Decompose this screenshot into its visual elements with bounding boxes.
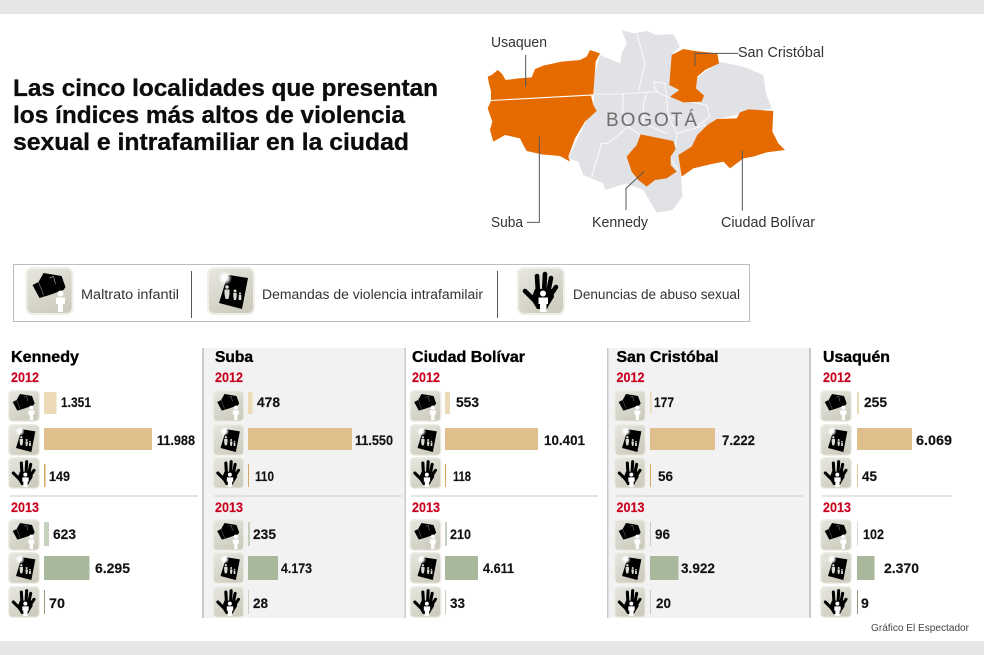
row: 2012 demandas <box>9 425 195 455</box>
map: gray districts <box>568 30 772 213</box>
legend: Demandas de violencia intrafamilair <box>208 268 484 314</box>
row: 2013 demandas <box>213 553 312 583</box>
row: 2013 demandas <box>821 553 919 583</box>
row: 2012 denuncias: 149 <box>49 468 70 484</box>
title <box>13 75 438 156</box>
row: 2013 maltrato: 235 <box>253 526 276 542</box>
row: 2012 maltrato <box>213 391 280 421</box>
row: 2013 demandas: 4.173 <box>281 560 312 576</box>
row: 2013 demandas <box>615 553 715 583</box>
panel: Ciudad Bolívar <box>410 349 598 617</box>
row: 2012 maltrato: 255 <box>864 394 887 410</box>
heading: Kennedy <box>11 349 79 366</box>
year 2013: 2013 <box>215 499 243 515</box>
row: 2013 denuncias <box>821 587 869 617</box>
title: los índices más altos de violencia <box>13 102 406 129</box>
row: 2012 demandas <box>821 425 952 455</box>
row: 2012 demandas <box>213 425 393 455</box>
row: 2012 denuncias: 56 <box>658 468 673 484</box>
legend: Maltrato infantil <box>26 268 179 314</box>
year 2012: 2012 <box>215 369 243 385</box>
row: 2012 demandas: 7.222 <box>722 432 755 448</box>
map: Ciudad Bolívar district <box>678 109 785 177</box>
row: 2013 demandas: 4.611 <box>483 560 514 576</box>
row: 2013 denuncias <box>9 587 65 617</box>
panel: Suba background <box>203 348 405 618</box>
row: 2012 denuncias <box>213 458 274 488</box>
row: 2013 maltrato <box>410 520 471 550</box>
row: 2013 denuncias: 9 <box>861 595 869 611</box>
row: 2012 maltrato: 177 <box>654 394 674 410</box>
label: Usaquen: Usaquen <box>491 35 547 51</box>
year 2013: 2013 <box>823 499 851 515</box>
map of Bogotá <box>488 30 824 231</box>
row: 2013 maltrato <box>9 520 76 550</box>
title: sexual e intrafamiliar en la ciudad <box>13 129 409 156</box>
bottom band <box>0 641 984 655</box>
map: San Cristóbal district <box>669 49 719 102</box>
row: 2013 denuncias <box>615 587 671 617</box>
panel: San Cristóbal <box>615 349 803 617</box>
row: 2012 denuncias: 118 <box>453 468 471 484</box>
row: 2012 maltrato <box>615 391 674 421</box>
row: 2013 denuncias: 70 <box>49 595 65 611</box>
panel: Suba <box>213 349 402 617</box>
row: 2012 demandas <box>615 425 755 455</box>
row: 2013 demandas: 3.922 <box>681 560 715 576</box>
row: 2013 maltrato: 102 <box>863 526 884 542</box>
legend: Demandas de violencia intrafamilair: Demandas de violencia intrafamilair <box>262 287 484 302</box>
row: 2012 demandas: 10.401 <box>544 432 585 448</box>
row: 2012 maltrato <box>821 391 887 421</box>
row: 2012 demandas: 6.069 <box>916 432 952 448</box>
row: 2013 denuncias: 33 <box>450 595 465 611</box>
row: 2013 maltrato <box>213 520 276 550</box>
row: 2012 maltrato: 478 <box>257 394 280 410</box>
row: 2013 denuncias: 28 <box>253 595 268 611</box>
map: Kennedy district <box>627 134 677 187</box>
top band <box>0 0 984 14</box>
title: Las cinco localidades que presentan <box>13 75 438 102</box>
label: Kennedy: Kennedy <box>592 215 649 231</box>
row: 2013 demandas: 2.370 <box>884 560 919 576</box>
row: 2012 maltrato: 1.351 <box>61 394 91 410</box>
row: 2012 denuncias <box>821 458 877 488</box>
map: leader lines <box>526 53 742 222</box>
row: 2012 maltrato <box>9 391 91 421</box>
row: 2013 demandas: 6.295 <box>95 560 130 576</box>
credit: Gráfico El Espectador <box>871 623 970 634</box>
row: 2013 demandas <box>9 553 130 583</box>
row: 2012 demandas <box>410 425 585 455</box>
legend: Denuncias de abuso sexual: Denuncias de abuso sexual <box>573 287 740 302</box>
year 2012: 2012 <box>616 369 645 385</box>
row: 2012 maltrato <box>410 391 479 421</box>
row: 2012 denuncias <box>615 458 673 488</box>
year 2012: 2012 <box>11 369 39 385</box>
row: 2012 denuncias: 45 <box>862 468 877 484</box>
year 2013: 2013 <box>412 499 440 515</box>
row: 2013 demandas <box>410 553 514 583</box>
row: 2013 maltrato <box>615 520 670 550</box>
year 2012: 2012 <box>412 369 440 385</box>
panel: Kennedy <box>9 349 198 617</box>
label: San Cristóbal: San Cristóbal <box>738 45 824 61</box>
row: 2012 maltrato: 553 <box>456 394 479 410</box>
year 2013: 2013 <box>616 499 645 515</box>
legend: Denuncias de abuso sexual <box>518 268 740 314</box>
panel: Usaquén <box>821 349 952 617</box>
map: Suba district <box>488 96 597 162</box>
year 2012: 2012 <box>823 369 851 385</box>
label: Ciudad Bolívar: Ciudad Bolívar <box>721 215 815 231</box>
map: Usaquén district <box>488 50 600 100</box>
row: 2013 denuncias <box>213 587 268 617</box>
row: 2012 demandas: 11.550 <box>355 432 393 448</box>
heading: Usaquén <box>823 349 890 366</box>
legend: Maltrato infantil: Maltrato infantil <box>81 287 179 302</box>
map: city label: BOGOTÁ <box>606 110 697 131</box>
label: Suba: Suba <box>491 215 524 231</box>
row: 2013 maltrato: 210 <box>450 526 471 542</box>
row: 2012 demandas: 11.988 <box>157 432 195 448</box>
row: 2012 denuncias <box>410 458 471 488</box>
heading: Ciudad Bolívar <box>412 349 525 366</box>
row: 2013 maltrato <box>821 520 884 550</box>
row: 2013 maltrato: 96 <box>655 526 670 542</box>
heading: Suba <box>215 349 253 366</box>
row: 2012 denuncias <box>9 458 70 488</box>
heading: San Cristóbal <box>616 349 718 366</box>
row: 2012 denuncias: 110 <box>255 468 274 484</box>
legend <box>14 264 750 322</box>
panel: San Cristóbal background <box>607 348 810 618</box>
year 2013: 2013 <box>11 499 39 515</box>
row: 2013 denuncias: 20 <box>656 595 671 611</box>
row: 2013 maltrato: 623 <box>53 526 76 542</box>
row: 2013 denuncias <box>410 587 465 617</box>
